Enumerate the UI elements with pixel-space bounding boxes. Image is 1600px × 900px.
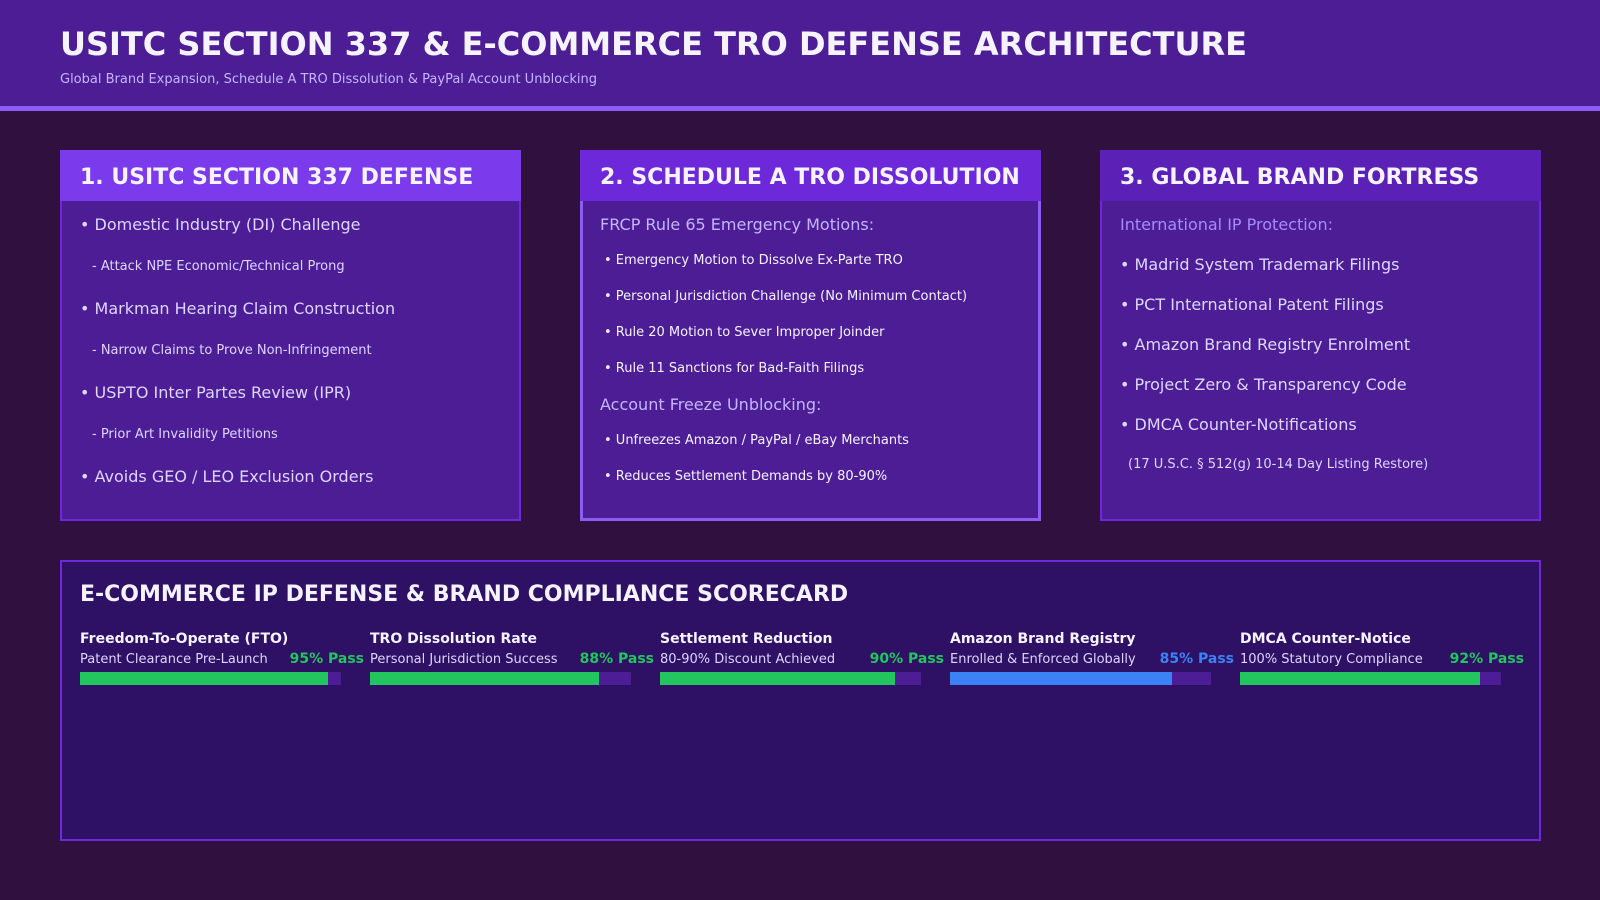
panel 3 list: (17 U.S.C. § 512(g) 10-14 Day Listing Restore) — [1128, 457, 1428, 472]
panel 1 list: • USPTO Inter Partes Review (IPR) — [80, 383, 351, 402]
panel 3 heading: 3. GLOBAL BRAND FORTRESS — [1120, 165, 1479, 190]
panel: compliance scorecard — [61, 561, 1540, 840]
panel 1 list: - Prior Art Invalidity Petitions — [92, 427, 278, 442]
metric: TRO dissolution rate: 88% Pass — [580, 651, 654, 667]
panel 1 list: • Avoids GEO / LEO Exclusion Orders — [80, 467, 373, 486]
title: USITC SECTION 337 & E-COMMERCE TRO DEFENSE ARCHITECTURE — [60, 25, 1247, 63]
panel 3 list — [1120, 215, 1428, 472]
panel 1 list: - Narrow Claims to Prove Non-Infringement — [92, 343, 372, 358]
panel: Global brand fortress — [1100, 150, 1541, 520]
panel: USITC Section 337 defense — [60, 150, 521, 520]
metric: DMCA counter-notice: 100% Statutory Compliance — [1240, 652, 1423, 667]
metric: DMCA counter-notice — [1240, 631, 1524, 685]
metric: TRO dissolution rate: TRO Dissolution Rate — [370, 631, 537, 647]
metric: settlement reduction: 90% Pass — [870, 651, 944, 667]
panel 2 list: • Reduces Settlement Demands by 80-90% — [604, 469, 887, 484]
panel 2 list: • Emergency Motion to Dissolve Ex-Parte TRO — [604, 253, 903, 268]
metric: Freedom-To-Operate — [80, 631, 364, 685]
header banner — [0, 0, 1600, 111]
metric: Freedom-To-Operate: 95% Pass — [290, 651, 364, 667]
metric: settlement reduction: Settlement Reduction — [660, 631, 833, 647]
panel 2 list: • Unfreezes Amazon / PayPal / eBay Merchants — [604, 433, 909, 448]
scorecard heading: E-COMMERCE IP DEFENSE & BRAND COMPLIANCE SCORECARD — [80, 582, 848, 607]
metric: DMCA counter-notice: DMCA Counter-Notice — [1240, 631, 1411, 647]
metric: Freedom-To-Operate: Freedom-To-Operate (FTO) — [80, 631, 288, 647]
metric: settlement reduction — [660, 631, 944, 685]
panel 2 list: Account Freeze Unblocking: — [600, 395, 821, 414]
panel 3 list: • PCT International Patent Filings — [1120, 295, 1384, 314]
metric: Freedom-To-Operate: Patent Clearance Pre-Launch — [80, 652, 268, 667]
panel 2 list — [600, 215, 967, 484]
panel 1 list: • Domestic Industry (DI) Challenge — [80, 215, 360, 234]
panel 2 list: FRCP Rule 65 Emergency Motions: — [600, 215, 874, 234]
metric: TRO dissolution rate — [370, 631, 654, 685]
metric: Amazon brand registry: Amazon Brand Registry — [950, 631, 1136, 647]
metric: Amazon brand registry — [950, 631, 1234, 685]
panel 1 list: • Markman Hearing Claim Construction — [80, 299, 395, 318]
subtitle: Global Brand Expansion, Schedule A TRO Dissolution & PayPal Account Unblocking — [60, 72, 597, 87]
metric: TRO dissolution rate: Personal Jurisdiction Success — [370, 652, 558, 667]
panel 2 list: • Personal Jurisdiction Challenge (No Minimum Contact) — [604, 289, 967, 304]
panel 3 list: • Madrid System Trademark Filings — [1120, 255, 1399, 274]
metric: settlement reduction: 80-90% Discount Achieved — [660, 652, 835, 667]
panel 1 heading: 1. USITC SECTION 337 DEFENSE — [80, 165, 473, 190]
panel 2 list: • Rule 11 Sanctions for Bad-Faith Filings — [604, 361, 864, 376]
metric: DMCA counter-notice: 92% Pass — [1450, 651, 1524, 667]
metric: Amazon brand registry: 85% Pass — [1160, 651, 1234, 667]
panel 2 heading: 2. SCHEDULE A TRO DISSOLUTION — [600, 165, 1020, 190]
panel 3 list: • DMCA Counter-Notifications — [1120, 415, 1357, 434]
panel: Schedule A TRO dissolution — [580, 150, 1041, 520]
panel 3 list: • Project Zero & Transparency Code — [1120, 375, 1407, 394]
panel 1 list — [80, 215, 395, 486]
metric: Amazon brand registry: Enrolled & Enforced Globally — [950, 652, 1136, 667]
panel 2 list: • Rule 20 Motion to Sever Improper Joinder — [604, 325, 885, 340]
panel 1 list: - Attack NPE Economic/Technical Prong — [92, 259, 345, 274]
panel 3 list: • Amazon Brand Registry Enrolment — [1120, 335, 1410, 354]
panel 3 list: International IP Protection: — [1120, 215, 1333, 234]
